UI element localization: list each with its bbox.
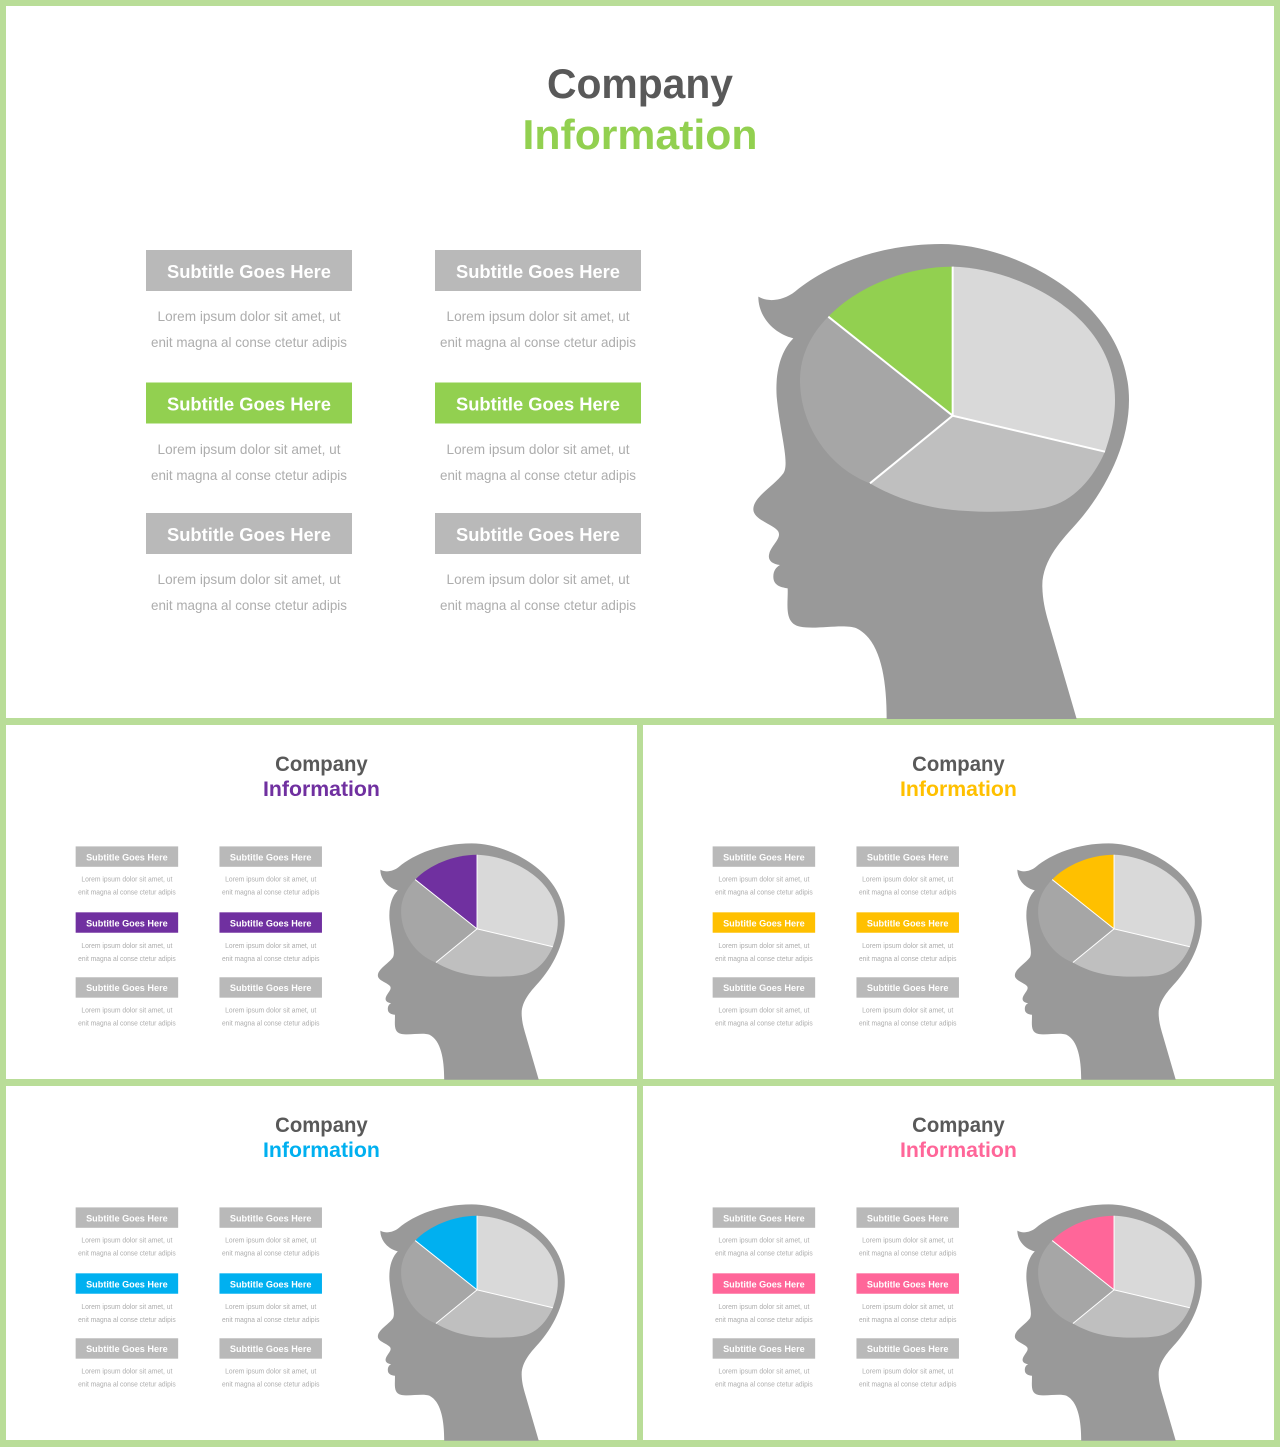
text block: left column 3: Subtitle Goes Here [723, 983, 805, 993]
text block: left column 1: enit magna al conse ctetur adipis [151, 334, 347, 350]
text block: right column 2: enit magna al conse ctetur adipis [222, 956, 320, 963]
text block: left column 3: Subtitle Goes Here [86, 1344, 168, 1354]
text block: right column 1: Lorem ipsum dolor sit amet, ut [446, 308, 630, 324]
text block: right column 2 [219, 912, 322, 963]
text block: left column 3: Subtitle Goes Here [723, 1344, 805, 1354]
text block: left column 1 [713, 1207, 815, 1258]
text block: left column 2 [76, 912, 178, 963]
text block: left column 2: Subtitle Goes Here [723, 918, 805, 928]
text block: right column 1: enit magna al conse ctetur adipis [222, 890, 320, 897]
text block: left column 2: Lorem ipsum dolor sit amet, ut [81, 1304, 172, 1311]
text block: left column 3: Lorem ipsum dolor sit amet, ut [81, 1369, 172, 1376]
text block: left column 3 [146, 513, 352, 613]
title: Company [275, 1114, 368, 1137]
text block: right column 3: enit magna al conse ctetur adipis [859, 1021, 957, 1028]
text block: left column 3: Lorem ipsum dolor sit amet, ut [718, 1008, 809, 1015]
text block: right column 1 [856, 846, 959, 897]
text block: right column 3: enit magna al conse ctetur adipis [222, 1382, 320, 1389]
head silhouette with pie chart [753, 244, 1129, 719]
text block: left column 1: Subtitle Goes Here [86, 1213, 168, 1223]
text block: left column 1: enit magna al conse ctetur adipis [715, 1251, 813, 1258]
text block: left column 2: enit magna al conse ctetur adipis [78, 956, 176, 963]
text block: right column 2: Lorem ipsum dolor sit amet, ut [225, 943, 316, 950]
text block: left column 2: Lorem ipsum dolor sit amet, ut [81, 943, 172, 950]
head silhouette with pie chart [378, 1204, 565, 1441]
text block: left column 2: enit magna al conse ctetur adipis [715, 1317, 813, 1324]
text block: left column 2 [713, 912, 815, 963]
text block: right column 3: Lorem ipsum dolor sit amet, ut [225, 1008, 316, 1015]
text block: left column 2 [713, 1273, 815, 1324]
text block: left column 1: Lorem ipsum dolor sit amet, ut [718, 877, 809, 884]
text block: left column 2: Lorem ipsum dolor sit amet, ut [718, 1304, 809, 1311]
text block: right column 1: enit magna al conse ctetur adipis [859, 890, 957, 897]
text block: right column 2 [856, 912, 959, 963]
text block: right column 3 [435, 513, 641, 613]
text block: right column 3: enit magna al conse ctetur adipis [859, 1382, 957, 1389]
text block: left column 1 [713, 846, 815, 897]
text block: left column 3: Subtitle Goes Here [167, 525, 331, 545]
text block: right column 1: Subtitle Goes Here [456, 262, 620, 282]
text block: right column 3: Lorem ipsum dolor sit amet, ut [225, 1369, 316, 1376]
text block: right column 3 [219, 977, 322, 1028]
text block: right column 2: enit magna al conse ctetur adipis [859, 956, 957, 963]
text block: right column 2: Subtitle Goes Here [456, 394, 620, 414]
text block: right column 2: enit magna al conse ctetur adipis [859, 1317, 957, 1324]
text block: right column 2: Subtitle Goes Here [867, 918, 949, 928]
text block: right column 1 [219, 846, 322, 897]
text block: left column 1 [76, 1207, 178, 1258]
text block: right column 3: Subtitle Goes Here [867, 983, 949, 993]
panel: small slide blue [6, 1086, 637, 1441]
text block: left column 3 [76, 977, 178, 1028]
panel: small slide pink [643, 1086, 1274, 1441]
text block: left column 1: Subtitle Goes Here [723, 852, 805, 862]
panel: large slide green [6, 6, 1274, 719]
text block: right column 1 [219, 1207, 322, 1258]
text block: right column 1: Subtitle Goes Here [867, 1213, 949, 1223]
text block: right column 3 [856, 977, 959, 1028]
text block: right column 2: enit magna al conse ctetur adipis [222, 1317, 320, 1324]
panel: small slide yellow [643, 725, 1274, 1080]
text block: right column 1: Subtitle Goes Here [230, 1213, 312, 1223]
head silhouette with pie chart [1015, 1204, 1202, 1441]
text block: left column 2: enit magna al conse ctetur adipis [151, 467, 347, 483]
text block: right column 3: enit magna al conse ctetur adipis [440, 597, 636, 613]
text block: left column 1 [146, 250, 352, 350]
text block: left column 2: Subtitle Goes Here [167, 394, 331, 414]
text block: left column 1: Subtitle Goes Here [86, 852, 168, 862]
text block: right column 1: enit magna al conse ctetur adipis [222, 1251, 320, 1258]
text block: right column 3 [856, 1338, 959, 1389]
text block: right column 2: Subtitle Goes Here [230, 1279, 312, 1289]
text block: left column 3 [713, 1338, 815, 1389]
text block: left column 3 [76, 1338, 178, 1389]
text block: left column 1: Subtitle Goes Here [167, 262, 331, 282]
text block: right column 2 [856, 1273, 959, 1324]
text block: left column 2 [76, 1273, 178, 1324]
text block: right column 3: enit magna al conse ctetur adipis [222, 1021, 320, 1028]
text block: right column 2: Subtitle Goes Here [867, 1279, 949, 1289]
text block: left column 1: Lorem ipsum dolor sit amet, ut [158, 308, 341, 324]
text block: left column 1: enit magna al conse ctetur adipis [715, 890, 813, 897]
text block: right column 1 [435, 250, 641, 350]
text block: right column 1 [856, 1207, 959, 1258]
title: Company [547, 60, 734, 107]
text block: right column 1: Subtitle Goes Here [230, 852, 312, 862]
text block: right column 2: Subtitle Goes Here [230, 918, 312, 928]
panel: small slide purple [6, 725, 637, 1080]
text block: right column 3: Subtitle Goes Here [867, 1344, 949, 1354]
text block: left column 3: Lorem ipsum dolor sit amet, ut [718, 1369, 809, 1376]
text block: right column 1: enit magna al conse ctetur adipis [440, 334, 636, 350]
text block: left column 3: enit magna al conse ctetur adipis [715, 1382, 813, 1389]
text block: right column 2: enit magna al conse ctetur adipis [440, 467, 636, 483]
text block: right column 1: enit magna al conse ctetur adipis [859, 1251, 957, 1258]
text block: right column 3: Lorem ipsum dolor sit amet, ut [446, 571, 630, 587]
title: Company [912, 753, 1005, 776]
title: Information [522, 111, 758, 158]
text block: right column 1: Subtitle Goes Here [867, 852, 949, 862]
text block: left column 2: enit magna al conse ctetur adipis [715, 956, 813, 963]
text block: left column 3: enit magna al conse ctetur adipis [78, 1382, 176, 1389]
text block: left column 1: Lorem ipsum dolor sit amet, ut [718, 1238, 809, 1245]
text block: right column 3: Subtitle Goes Here [230, 1344, 312, 1354]
text block: right column 2: Lorem ipsum dolor sit amet, ut [862, 943, 953, 950]
text block: left column 2: Lorem ipsum dolor sit amet, ut [718, 943, 809, 950]
head silhouette with pie chart [378, 843, 565, 1080]
text block: left column 3: enit magna al conse ctetur adipis [151, 597, 347, 613]
title: Company [275, 753, 368, 776]
text block: right column 3: Lorem ipsum dolor sit amet, ut [862, 1008, 953, 1015]
title: Information [900, 778, 1017, 801]
text block: right column 3: Lorem ipsum dolor sit amet, ut [862, 1369, 953, 1376]
title: Company [912, 1114, 1005, 1137]
head silhouette with pie chart [1015, 843, 1202, 1080]
title: Information [263, 778, 380, 801]
text block: right column 2: Lorem ipsum dolor sit amet, ut [862, 1304, 953, 1311]
title [522, 60, 758, 158]
text block: left column 2: enit magna al conse ctetur adipis [78, 1317, 176, 1324]
text block: right column 2: Lorem ipsum dolor sit amet, ut [225, 1304, 316, 1311]
text block: left column 1: enit magna al conse ctetur adipis [78, 1251, 176, 1258]
text block: left column 1 [76, 846, 178, 897]
text block: left column 2: Subtitle Goes Here [86, 918, 168, 928]
text block: left column 2: Lorem ipsum dolor sit amet, ut [158, 441, 341, 457]
text block: right column 2: Lorem ipsum dolor sit amet, ut [446, 441, 630, 457]
text block: left column 1: Lorem ipsum dolor sit amet, ut [81, 1238, 172, 1245]
text block: left column 3: Lorem ipsum dolor sit amet, ut [158, 571, 341, 587]
text block: right column 3 [219, 1338, 322, 1389]
text block: right column 1: Lorem ipsum dolor sit amet, ut [225, 1238, 316, 1245]
text block: left column 3: Lorem ipsum dolor sit amet, ut [81, 1008, 172, 1015]
text block: left column 1: Lorem ipsum dolor sit amet, ut [81, 877, 172, 884]
text block: left column 3: enit magna al conse ctetur adipis [715, 1021, 813, 1028]
text block: left column 2 [146, 382, 352, 483]
title: Information [900, 1139, 1017, 1162]
text block: left column 3: enit magna al conse ctetur adipis [78, 1021, 176, 1028]
text block: right column 1: Lorem ipsum dolor sit amet, ut [862, 877, 953, 884]
text block: right column 1: Lorem ipsum dolor sit amet, ut [225, 877, 316, 884]
title [900, 1114, 1017, 1162]
text block: left column 1: enit magna al conse ctetur adipis [78, 890, 176, 897]
text block: right column 1: Lorem ipsum dolor sit amet, ut [862, 1238, 953, 1245]
text block: left column 2: Subtitle Goes Here [86, 1279, 168, 1289]
title [263, 1114, 380, 1162]
text block: left column 2: Subtitle Goes Here [723, 1279, 805, 1289]
text block: right column 3: Subtitle Goes Here [456, 525, 620, 545]
text block: left column 3: Subtitle Goes Here [86, 983, 168, 993]
text block: right column 2 [219, 1273, 322, 1324]
title: Information [263, 1139, 380, 1162]
title [900, 753, 1017, 801]
text block: right column 2 [435, 382, 641, 483]
text block: left column 1: Subtitle Goes Here [723, 1213, 805, 1223]
title [263, 753, 380, 801]
text block: left column 3 [713, 977, 815, 1028]
text block: right column 3: Subtitle Goes Here [230, 983, 312, 993]
